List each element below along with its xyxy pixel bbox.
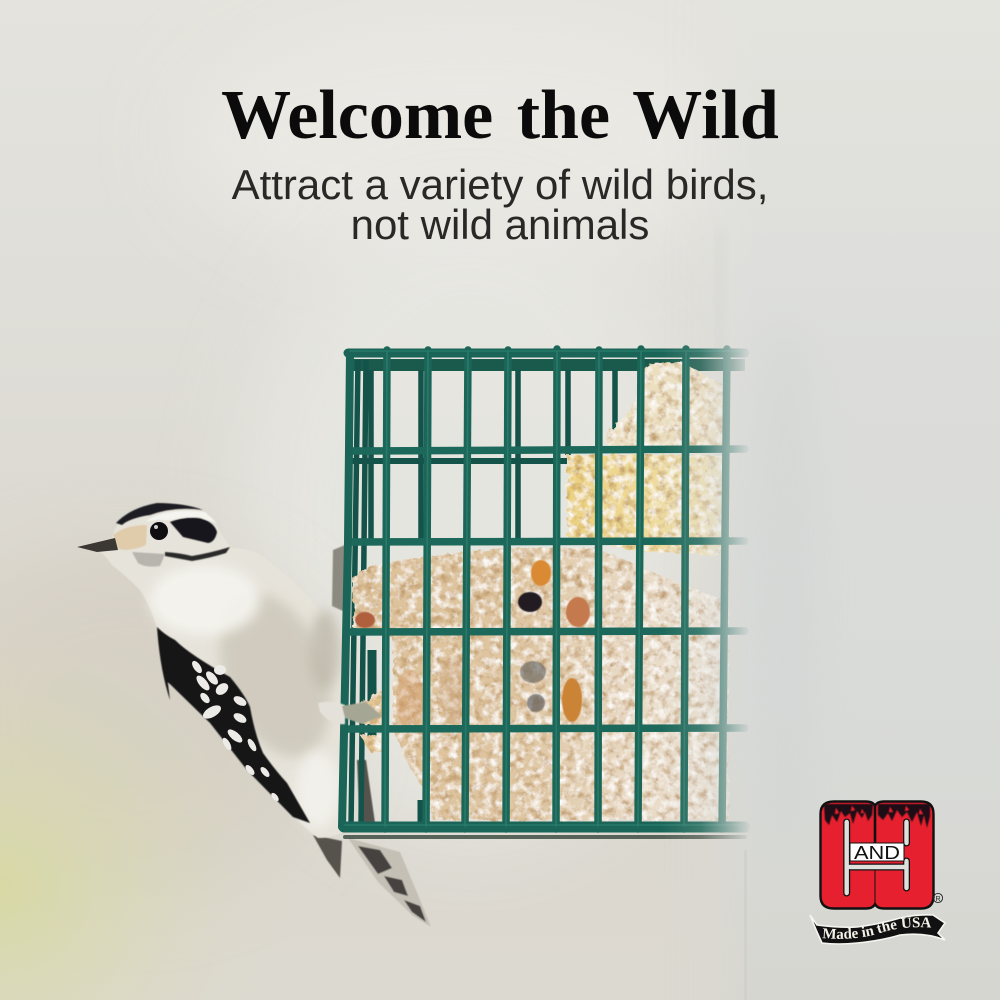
head stripes — [113, 503, 230, 567]
AND box: AND — [854, 842, 900, 863]
bird body — [77, 503, 350, 838]
right blurred foreground fade — [671, 345, 1000, 1000]
bird: downy woodpecker — [77, 503, 351, 838]
C and S logo — [810, 800, 946, 945]
food colour details — [355, 560, 590, 730]
subtitle: Attract a variety of wild birds, — [232, 161, 768, 208]
title: Welcome the Wild — [221, 77, 779, 154]
suet food block — [353, 362, 728, 820]
registered mark: R — [935, 896, 941, 903]
eye — [148, 520, 170, 542]
bird tail behind feeder — [313, 545, 431, 927]
feeder front grid — [342, 349, 745, 837]
logo letters — [820, 802, 934, 908]
feeder back grid — [351, 360, 745, 828]
subtitle — [232, 161, 768, 248]
Made in the USA ribbon: Made in the USA — [822, 917, 932, 939]
bottom shadow — [345, 835, 745, 839]
logo slots — [847, 822, 906, 893]
beak — [77, 538, 118, 552]
frame — [342, 353, 745, 827]
vertical wires — [385, 349, 727, 829]
wire highlights — [345, 351, 740, 826]
yellow suet — [567, 455, 728, 556]
wing spots — [190, 659, 280, 802]
logo flames — [824, 804, 930, 828]
registered mark — [933, 893, 943, 903]
subtitle: not wild animals — [351, 201, 649, 248]
bird foot — [318, 702, 382, 724]
bird wing — [157, 627, 310, 823]
lower suet — [353, 548, 728, 820]
upper pale suet — [607, 362, 728, 447]
horizontal wires — [345, 449, 745, 729]
